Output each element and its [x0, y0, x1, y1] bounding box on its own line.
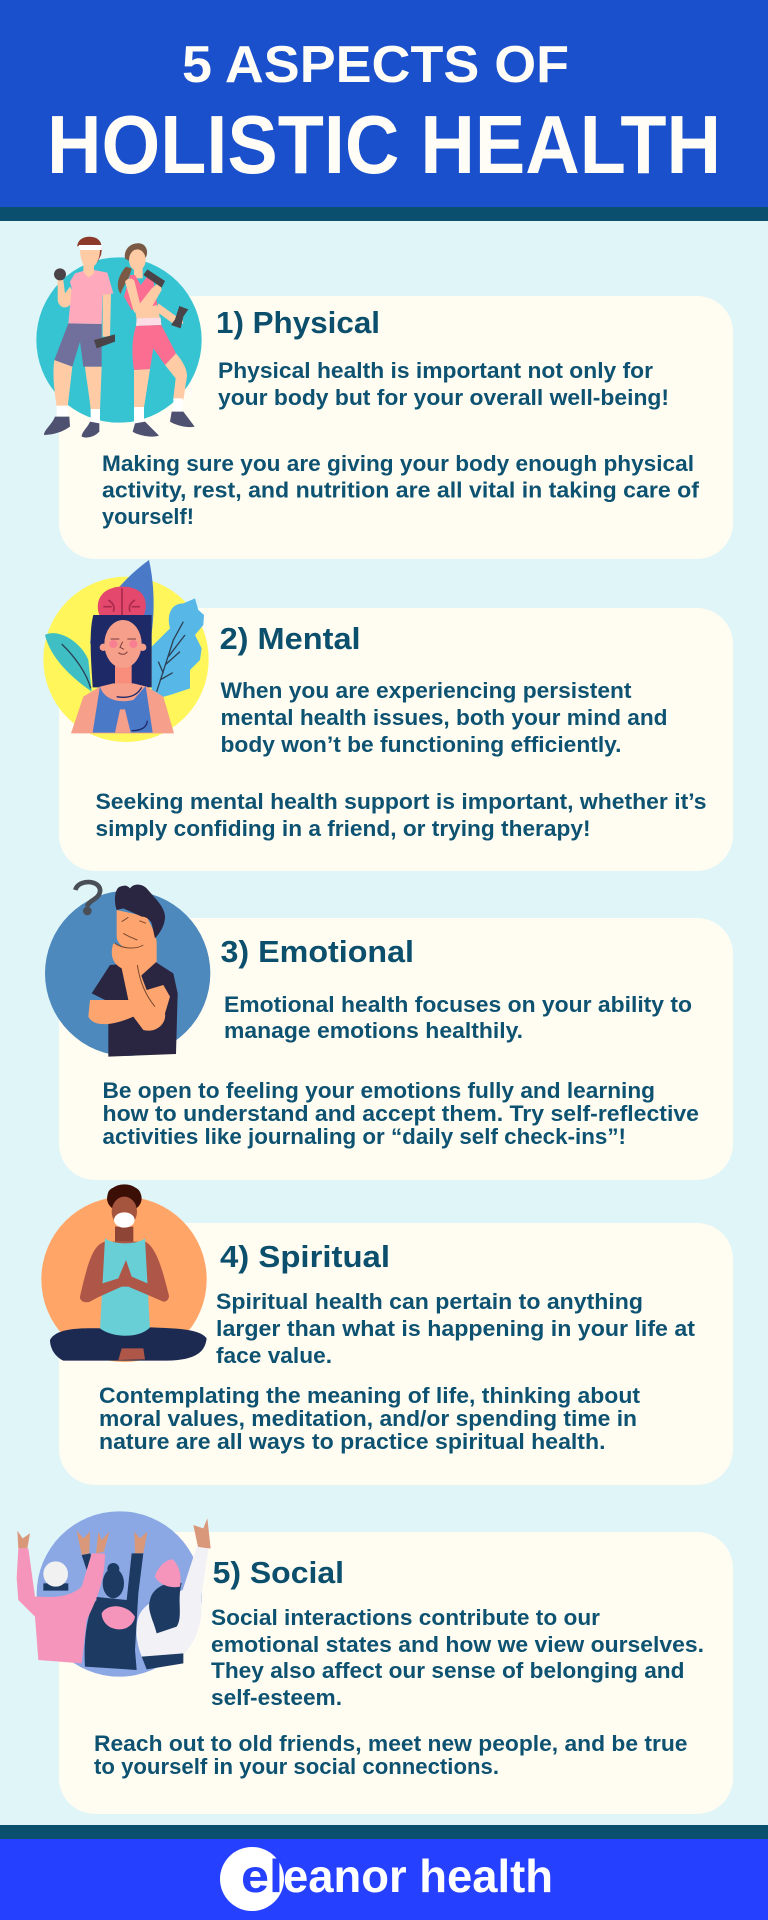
title line 2: HOLISTIC HEALTH: [47, 98, 721, 191]
header banner: [0, 0, 768, 221]
heading: 3) Emotional: [220, 934, 414, 969]
detail text: Be open to feeling your emotions fully and learning: [102, 1078, 655, 1103]
card background: [59, 608, 733, 871]
panel: spiritual: [41, 1184, 733, 1485]
intro text: They also affect our sense of belonging and: [211, 1658, 684, 1683]
detail text: moral values, meditation, and/or spending time in: [99, 1406, 637, 1431]
card background: [59, 1223, 733, 1485]
detail text: [94, 1731, 688, 1779]
icon: meditating person wearing mask: [41, 1184, 207, 1362]
card background: [59, 296, 733, 559]
detail text: [99, 1383, 641, 1454]
icon: thinking man with question mark: [45, 882, 210, 1057]
title line 1: 5 ASPECTS OF: [182, 36, 569, 94]
detail text: [102, 1078, 699, 1149]
intro text: Social interactions contribute to our: [211, 1605, 600, 1630]
detail text: Seeking mental health support is important, whether it’s: [96, 789, 706, 814]
logo: eleanor health: el: [241, 1850, 283, 1902]
card background: [59, 1532, 733, 1814]
footer banner: [0, 1825, 768, 1920]
detail text: how to understand and accept them. Try self-reflective: [102, 1101, 699, 1126]
detail text: [96, 789, 706, 841]
intro text: [211, 1605, 704, 1710]
intro text: Emotional health focuses on your ability to: [224, 992, 692, 1017]
icon: meditating woman with brain: [43, 560, 209, 742]
intro text: your body but for your overall well-being!: [218, 385, 669, 410]
intro text: When you are experiencing persistent: [220, 678, 632, 703]
icon: man and woman exercising with dumbbells: [36, 237, 202, 438]
intro text: self-esteem.: [211, 1685, 342, 1710]
panel: mental: [43, 560, 733, 871]
intro text: emotional states and how we view ourselves.: [211, 1632, 704, 1657]
detail text: nature are all ways to practice spiritual health.: [99, 1429, 606, 1454]
detail text: Contemplating the meaning of life, thinking about: [99, 1383, 641, 1408]
logo: eleanor health: eanor health: [283, 1850, 553, 1902]
icon: three friends raising peace signs: [17, 1511, 211, 1677]
panel: physical: [36, 237, 733, 559]
heading: 2) Mental: [220, 621, 361, 656]
intro text: larger than what is happening in your life at: [216, 1316, 696, 1341]
detail text: activities like journaling or “daily self check-ins”!: [102, 1124, 626, 1149]
detail text: [102, 451, 700, 529]
intro text: [218, 358, 669, 410]
intro text: [224, 992, 692, 1043]
detail text: Making sure you are giving your body enough physical: [102, 451, 694, 476]
detail text: Reach out to old friends, meet new people, and be true: [94, 1731, 688, 1756]
intro text: Spiritual health can pertain to anything: [216, 1289, 643, 1314]
heading: 4) Spiritual: [220, 1239, 390, 1274]
intro text: manage emotions healthily.: [224, 1018, 523, 1043]
intro text: [220, 678, 668, 757]
panel: social: [17, 1511, 733, 1814]
intro text: [216, 1289, 696, 1368]
logo: eleanor health: [220, 1847, 553, 1911]
heading: 5) Social: [213, 1555, 344, 1590]
detail text: simply confiding in a friend, or trying therapy!: [96, 816, 590, 841]
intro text: body won’t be functioning efficiently.: [220, 732, 622, 757]
panel: emotional: [45, 882, 733, 1180]
detail text: to yourself in your social connections.: [94, 1754, 499, 1779]
intro text: mental health issues, both your mind and: [220, 705, 668, 730]
card background: [59, 918, 733, 1180]
detail text: activity, rest, and nutrition are all vital in taking care of: [102, 478, 700, 502]
intro text: Physical health is important not only for: [218, 358, 653, 383]
detail text: yourself!: [102, 504, 194, 529]
intro text: face value.: [216, 1343, 332, 1368]
heading: 1) Physical: [216, 305, 380, 340]
